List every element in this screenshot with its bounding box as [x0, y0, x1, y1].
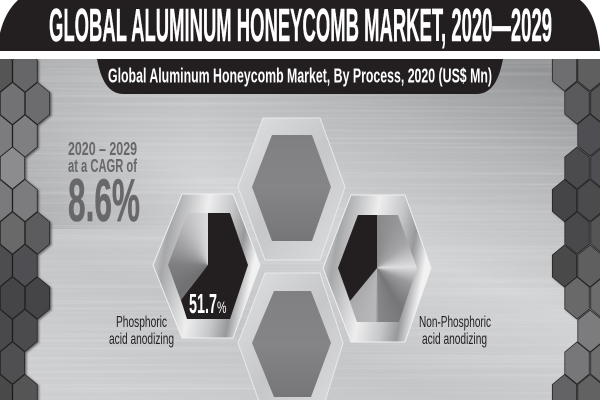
label: Phosphoric acid anodizing: acid anodizing: [109, 331, 174, 348]
label: Non-Phosphoric acid anodizing: acid anodizing: [422, 331, 487, 348]
left hexagon value: 51.7: [189, 288, 217, 319]
right hexagon: Non-Phosphoric pie: [322, 194, 432, 342]
right honeycomb decoration: [552, 59, 600, 400]
label: Non-Phosphoric acid anodizing: Non-Phosphoric: [419, 314, 491, 331]
header banner: [0, 0, 600, 51]
left hexagon: Phosphoric pie: [152, 194, 260, 338]
CAGR callout: 8.6%: [68, 167, 140, 234]
CAGR callout: 2020 – 2029: [68, 139, 137, 159]
right hexagon grey share: [338, 215, 417, 322]
left hexagon grey share: [168, 213, 242, 310]
left hexagon value: %: [217, 298, 226, 317]
label: Phosphoric acid anodizing: Phosphoric: [116, 314, 167, 331]
left honeycomb decoration: [0, 59, 53, 400]
CAGR callout: at a CAGR of: [68, 156, 138, 176]
